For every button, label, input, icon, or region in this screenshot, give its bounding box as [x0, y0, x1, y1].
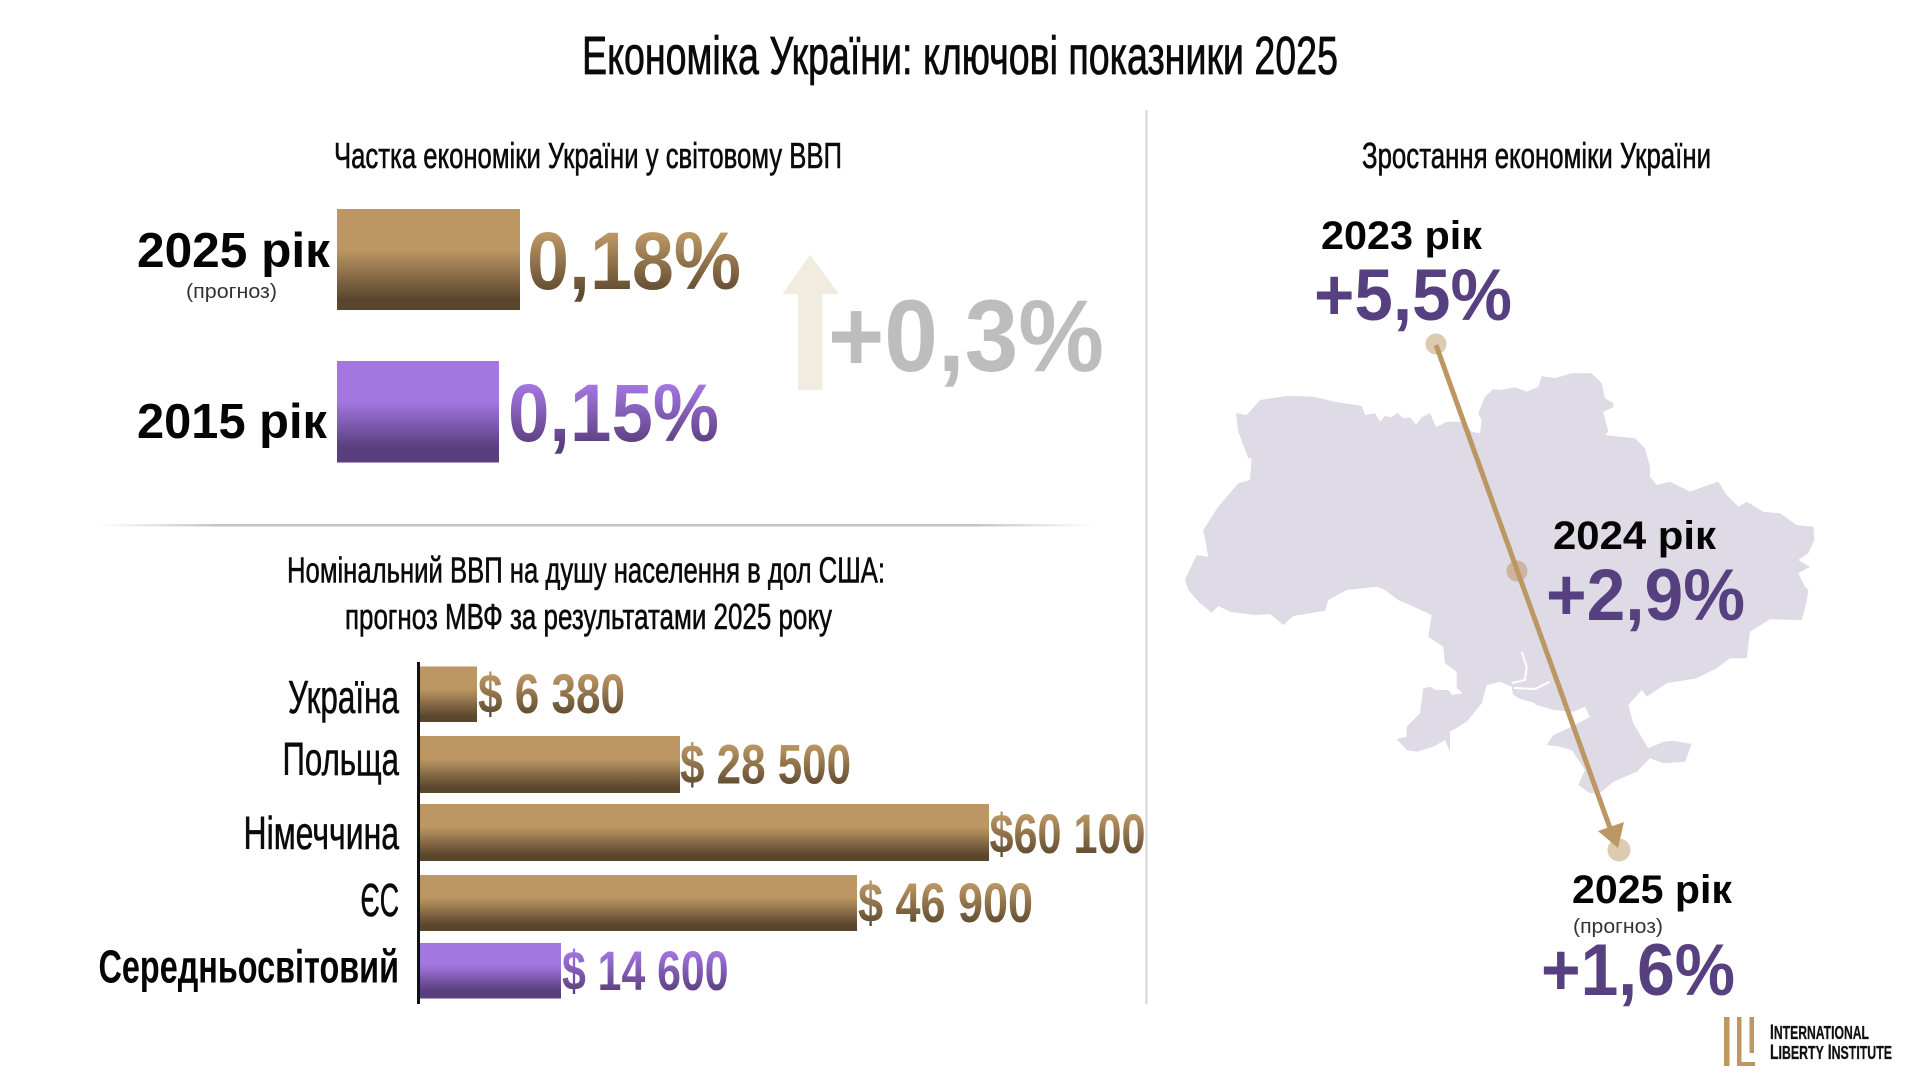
- title: Економіка України: ключові показники 2025: [582, 26, 1338, 86]
- heading: GDP per capita: [287, 550, 885, 637]
- bar: EU: [360, 871, 1033, 934]
- heading: GDP per capita: Номінальний ВВП на душу населення в дол США:: [287, 550, 885, 590]
- data: 2023 growth: [1314, 214, 1512, 336]
- row: 2015 share: 2015 рік: [137, 395, 327, 449]
- row: 2025 share: 2025 рік: [137, 224, 330, 278]
- data: 2025 growth: [1541, 868, 1735, 1011]
- data: 2025 growth: +1,6%: [1541, 930, 1735, 1011]
- heading: share of world GDP: Частка економіки України у світовому ВВП: [334, 135, 842, 176]
- row: 2025 share: (прогноз): [186, 281, 277, 303]
- bar: EU: ЄС: [360, 874, 399, 926]
- logo: International Liberty Institute: INTERNATIONAL: [1770, 1021, 1869, 1044]
- bar: world average: Середньосвітовий: [98, 940, 399, 992]
- row: 2025 share: [137, 209, 741, 310]
- panel: GDP per capita: [98, 550, 1146, 1004]
- bar: world average: [98, 939, 728, 1002]
- bar: Ukraine: [288, 662, 625, 725]
- bar: Ukraine: Україна: [288, 671, 399, 723]
- logo: International Liberty Institute: [1724, 1017, 1892, 1066]
- data: 2024 growth: [1546, 514, 1745, 636]
- bar: Poland: $ 28 500: [680, 732, 851, 796]
- callout: +0,3%: +0,3%: [828, 279, 1104, 393]
- data: 2023 growth: +5,5%: [1314, 255, 1512, 336]
- bar chart: GDP per capita: [98, 662, 1146, 1004]
- row: 2025 share: 0,18%: [527, 216, 741, 307]
- bar: Germany: [244, 802, 1146, 865]
- arrow: increase: [782, 255, 839, 390]
- data: 2023 growth: 2023 рік: [1321, 214, 1483, 258]
- bar: Germany: Німеччина: [244, 807, 399, 859]
- data: 2025 growth: 2025 рік: [1572, 868, 1733, 912]
- data: 2025 growth: (прогноз): [1573, 916, 1663, 938]
- logo: International Liberty Institute: LIBERTY INSTITUTE: [1770, 1041, 1892, 1064]
- bar: Poland: [282, 732, 851, 796]
- row: 2015 share: [137, 361, 719, 462]
- data: 2024 growth: +2,9%: [1546, 555, 1745, 636]
- bar: world average: $ 14 600: [562, 939, 728, 1002]
- map: Ukraine: [1185, 373, 1814, 793]
- panel: share of world GDP: [137, 135, 1104, 462]
- row: 2015 share: 0,15%: [508, 368, 719, 459]
- bar: EU: $ 46 900: [858, 871, 1033, 934]
- arrow: growth trend: [1426, 334, 1630, 862]
- data: 2024 growth: 2024 рік: [1553, 514, 1717, 558]
- heading: GDP per capita: прогноз МВФ за результатами 2025 року: [345, 596, 832, 637]
- bar: Poland: Польща: [282, 733, 399, 785]
- bar: Ukraine: $ 6 380: [478, 662, 625, 725]
- heading: growth: Зростання економіки України: [1362, 135, 1711, 176]
- bar: Germany: $60 100: [990, 802, 1146, 865]
- panel: economic growth: [1185, 135, 1814, 1011]
